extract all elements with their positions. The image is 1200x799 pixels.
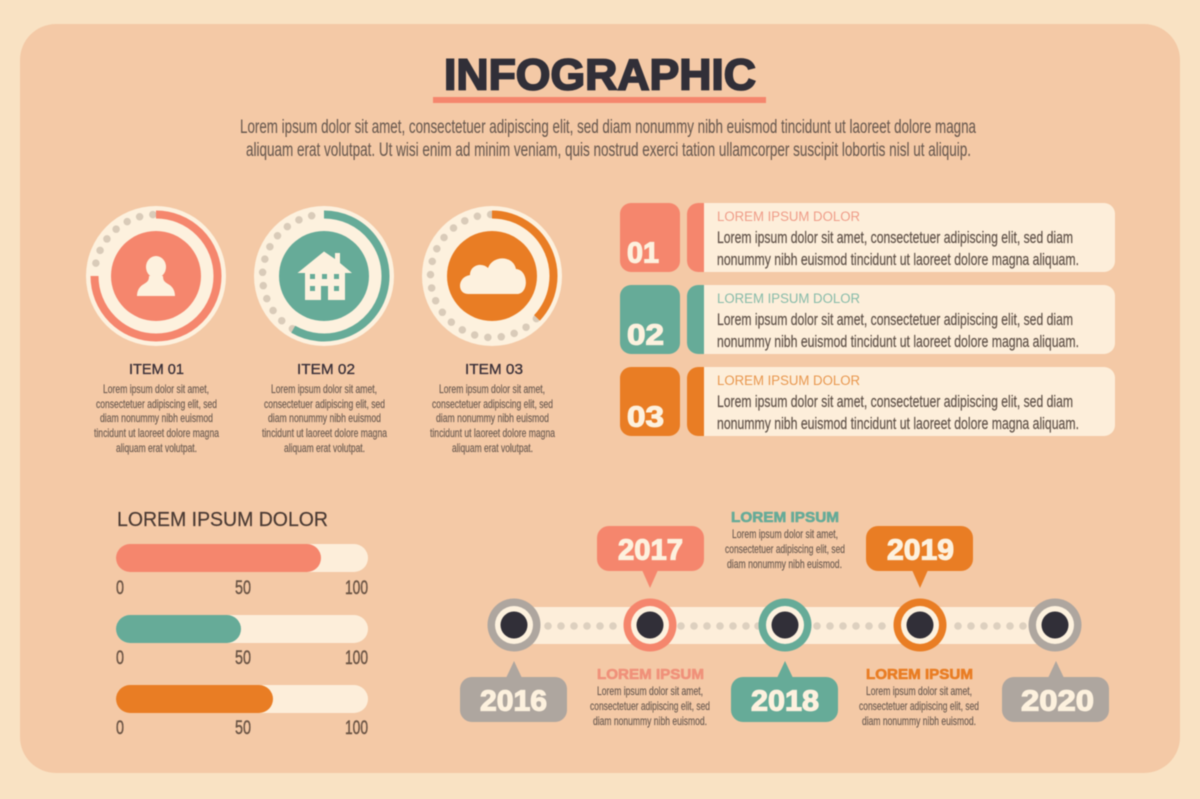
icon: house	[298, 252, 352, 300]
item 02 description: Lorem ipsum dolor sit amet,	[271, 382, 377, 396]
number tile 03: 03	[627, 402, 664, 434]
number tile 02	[620, 285, 680, 354]
progress bar 2: 50	[235, 648, 251, 669]
timeline node 2016	[488, 598, 540, 652]
timeline node 2018	[758, 598, 812, 652]
item 01 description	[94, 382, 219, 455]
timeline node 2019	[894, 598, 946, 652]
progress bar 2: 100	[345, 648, 368, 669]
item 02 description: consectetuer adipiscing elit, sed	[264, 397, 385, 411]
icon: cloud	[460, 258, 526, 294]
timeline note 2018	[725, 510, 845, 571]
callout: 2020	[1002, 661, 1109, 722]
item 03 description: tincidunt ut laoreet dolore magna	[430, 426, 555, 440]
timeline note 2017: diam nonummy nibh euismod.	[593, 714, 707, 728]
text card 03	[687, 367, 1115, 436]
timeline note 2018: diam nonummy nibh euismod.	[727, 557, 842, 571]
text card 03: LOREM IPSUM DOLOR	[717, 373, 860, 388]
timeline note 2017: consectetuer adipiscing elit, sed	[590, 699, 710, 713]
text card 01: Lorem ipsum dolor sit amet, consectetuer adipiscing elit, sed diam	[717, 228, 1073, 247]
bars heading: LOREM IPSUM DOLOR	[117, 509, 328, 531]
title: INFOGRAPHIC	[444, 50, 756, 100]
item 01 description: aliquam erat volutpat.	[116, 441, 197, 455]
timeline note 2018: Lorem ipsum dolor sit amet,	[732, 527, 838, 541]
panel: item 01	[86, 206, 226, 455]
item 01 description: tincidunt ut laoreet dolore magna	[94, 426, 219, 440]
progress bar 3: 0	[116, 718, 124, 739]
item 03 label: ITEM 03	[465, 361, 523, 378]
progress bar 1: 100	[345, 578, 368, 599]
progress bar 1	[116, 544, 368, 599]
callout: 2017: 2017	[618, 534, 683, 566]
donut gauge 01	[86, 206, 226, 346]
item 01 description: diam nonummy nibh euismod	[100, 411, 213, 425]
item 01 description: consectetuer adipiscing elit, sed	[96, 397, 217, 411]
panel: progress bars	[116, 509, 368, 739]
text card 02: LOREM IPSUM DOLOR	[717, 291, 860, 306]
timeline note 2017	[590, 667, 710, 728]
icon: person	[137, 256, 175, 296]
timeline note 2018: LOREM IPSUM	[731, 510, 839, 526]
number tile 02: 02	[627, 320, 664, 352]
number tile 03	[620, 367, 680, 436]
panel: list row 03	[620, 367, 1115, 436]
progress bar 1: 0	[116, 578, 124, 599]
callout: 2016	[460, 661, 567, 722]
panel: item 02	[254, 206, 394, 455]
item 01 description: Lorem ipsum dolor sit amet,	[103, 382, 209, 396]
callout: 2016: 2016	[480, 686, 547, 718]
callout: 2019: 2019	[887, 534, 954, 566]
item 03 description: diam nonummy nibh euismod	[436, 411, 549, 425]
timeline note 2019	[859, 667, 979, 728]
panel: timeline	[460, 510, 1109, 728]
callout: 2019	[866, 526, 973, 588]
progress bar 3: 100	[345, 718, 368, 739]
item 02 description: diam nonummy nibh euismod	[268, 411, 381, 425]
number tile 01: 01	[627, 238, 659, 270]
item 02 description: aliquam erat volutpat.	[284, 441, 365, 455]
item 02 description: tincidunt ut laoreet dolore magna	[262, 426, 387, 440]
callout: 2018: 2018	[751, 686, 819, 718]
item 03 description: Lorem ipsum dolor sit amet,	[439, 382, 545, 396]
panel: list row 01	[620, 203, 1115, 272]
progress bar 3: 50	[235, 718, 251, 739]
timeline node 2020	[1028, 598, 1082, 652]
text card 01: LOREM IPSUM DOLOR	[717, 209, 860, 224]
timeline note 2018: consectetuer adipiscing elit, sed	[725, 542, 845, 556]
timeline note 2019: LOREM IPSUM	[866, 667, 973, 683]
callout: 2020: 2020	[1021, 686, 1094, 718]
panel: item 03	[422, 206, 562, 455]
item 02 description	[262, 382, 387, 455]
progress bar 1: 50	[235, 578, 251, 599]
timeline note 2017: Lorem ipsum dolor sit amet,	[597, 684, 703, 698]
number tile 01	[620, 203, 680, 272]
donut gauge 03	[422, 206, 562, 346]
intro text	[240, 117, 976, 161]
timeline note 2017: LOREM IPSUM	[597, 667, 704, 683]
item 03 description: aliquam erat volutpat.	[452, 441, 533, 455]
timeline node 2017	[624, 598, 676, 652]
progress bar 2: 0	[116, 648, 124, 669]
progress bar 3	[116, 685, 368, 739]
timeline note 2019: consectetuer adipiscing elit, sed	[859, 699, 979, 713]
text card 02: Lorem ipsum dolor sit amet, consectetuer adipiscing elit, sed diam	[717, 310, 1073, 329]
callout: 2018	[731, 661, 838, 722]
item 03 description: consectetuer adipiscing elit, sed	[432, 397, 553, 411]
timeline track	[514, 607, 1055, 644]
callout: 2017	[597, 526, 704, 588]
item 03 description	[430, 382, 555, 455]
text card 03: Lorem ipsum dolor sit amet, consectetuer adipiscing elit, sed diam	[717, 392, 1073, 411]
timeline note 2019: Lorem ipsum dolor sit amet,	[866, 684, 972, 698]
text card 01	[687, 203, 1115, 272]
item 02 label: ITEM 02	[297, 361, 355, 378]
timeline note 2019: diam nonummy nibh euismod.	[862, 714, 976, 728]
item 01 label: ITEM 01	[129, 361, 184, 378]
text card 02	[687, 285, 1115, 354]
progress bar 2	[116, 615, 368, 669]
donut gauge 02	[254, 206, 394, 346]
panel: list row 02	[620, 285, 1115, 354]
